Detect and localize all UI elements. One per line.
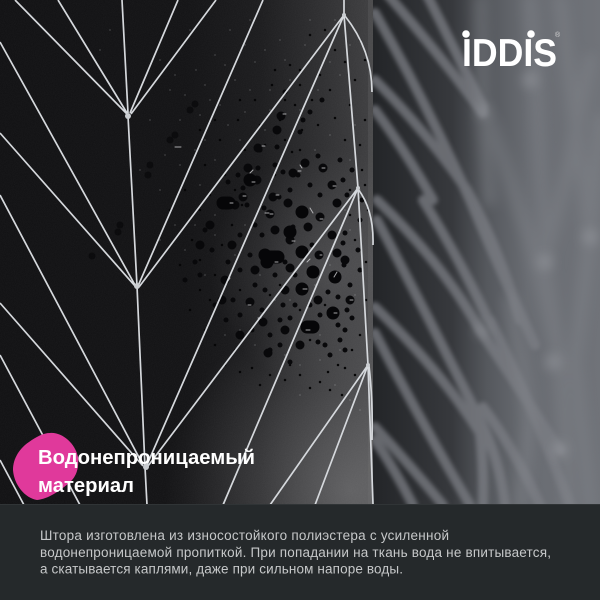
heading: waterproof material: материал <box>38 475 134 497</box>
logo: IDDIS: IDDIS <box>462 32 557 75</box>
text block: description: водонепроницаемой пропиткой. При попадании на ткань вода не впитывается, <box>40 545 551 560</box>
text block: description: Штора изготовлена из износостойкого полиэстера с усиленной <box>40 528 449 543</box>
pattern nodes: bright line junctions <box>125 13 370 470</box>
panel: foreground curtain with water drops <box>0 0 373 505</box>
accent: pink blob behind the heading <box>13 433 78 500</box>
heading: waterproof material <box>38 447 255 497</box>
panel: blurred curtain background on the right <box>373 0 600 505</box>
pattern: white geometric lines on the curtain <box>0 0 373 505</box>
panel: dark bottom caption band <box>0 504 600 600</box>
logo: IDDIS: ® <box>555 31 561 39</box>
text block: description: а скатывается каплями, даже при сильном напоре воды. <box>40 562 403 576</box>
heading: waterproof material: Водонепроницаемый <box>38 447 255 469</box>
text block: description <box>40 528 551 576</box>
